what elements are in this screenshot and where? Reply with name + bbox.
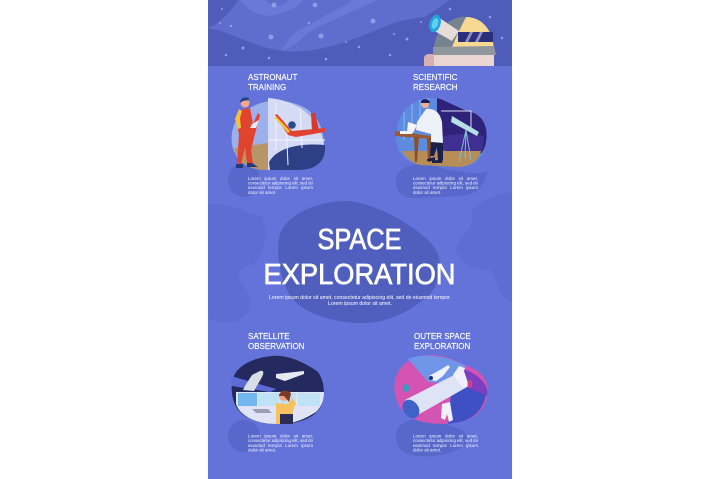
body text [248, 176, 313, 195]
body text: eiusmod tempor Lorem ipsum [413, 443, 478, 448]
body text [413, 434, 478, 453]
heading: EXPLORATION [414, 342, 471, 351]
nebula wave [208, 0, 450, 52]
subtitle: Lorem ipsum dolor sit amet. [328, 301, 392, 307]
body text: dolor sit amet. [413, 190, 441, 195]
subtitle [269, 295, 451, 307]
body text: Lorem ipsum dolor sit amet, [248, 176, 313, 181]
heading: SATELLITE [248, 332, 290, 341]
body text: consectetur adipiscing elit, sed do [413, 181, 478, 186]
body text: dolor sit amet. [248, 448, 276, 453]
heading: TRAINING [248, 83, 286, 92]
panel: scientific research [395, 73, 488, 198]
icon: observatory [424, 13, 496, 66]
central blob [278, 201, 440, 323]
body text: consectetur adipiscing elit, sed do [413, 438, 478, 443]
heading: SCIENTIFIC [413, 73, 457, 82]
illustration [394, 355, 488, 424]
illustration [395, 98, 487, 167]
panel: satellite observation [228, 332, 324, 453]
illustration [232, 97, 325, 170]
illustration [231, 356, 324, 424]
heading: OBSERVATION [248, 342, 305, 351]
body text: Lorem ipsum dolor sit amet, [413, 434, 478, 438]
header band [208, 0, 512, 66]
body text: consectetur adipiscing elit, sed do [248, 438, 313, 443]
body text: eiusmod tempor Lorem ipsum [413, 185, 478, 190]
heading: OUTER SPACE [414, 332, 471, 341]
blob shadow [396, 164, 488, 198]
small blob [228, 163, 260, 197]
small blob [228, 420, 260, 452]
body text: dolor sit amet. [413, 448, 441, 453]
heading: RESEARCH [413, 83, 458, 92]
body text: eiusmod tempor Lorem ipsum [248, 185, 313, 190]
title: EXPLORATION [264, 259, 456, 291]
body text: eiusmod tempor Lorem ipsum [248, 443, 313, 448]
subtitle: Lorem ipsum dolor sit amet, consectetur adipiscing elit, sed do eiusmod tempor. [269, 295, 451, 301]
stars [219, 2, 503, 60]
body text: dolor sit amet. [248, 190, 276, 195]
heading: ASTRONAUT [248, 73, 297, 82]
panel: astronaut training [228, 73, 325, 197]
body text: Lorem ipsum dolor sit amet, [413, 176, 478, 181]
blob shadow [396, 419, 470, 456]
title [264, 224, 456, 291]
body text: consectetur adipiscing elit, sed do [248, 181, 313, 186]
poster background [208, 0, 512, 479]
body text: Lorem ipsum dolor sit amet, [248, 434, 313, 438]
body text [248, 434, 313, 453]
title: SPACE [318, 224, 402, 256]
body text [413, 176, 478, 195]
panel: outer space exploration [394, 332, 488, 456]
background blobs [208, 192, 512, 323]
